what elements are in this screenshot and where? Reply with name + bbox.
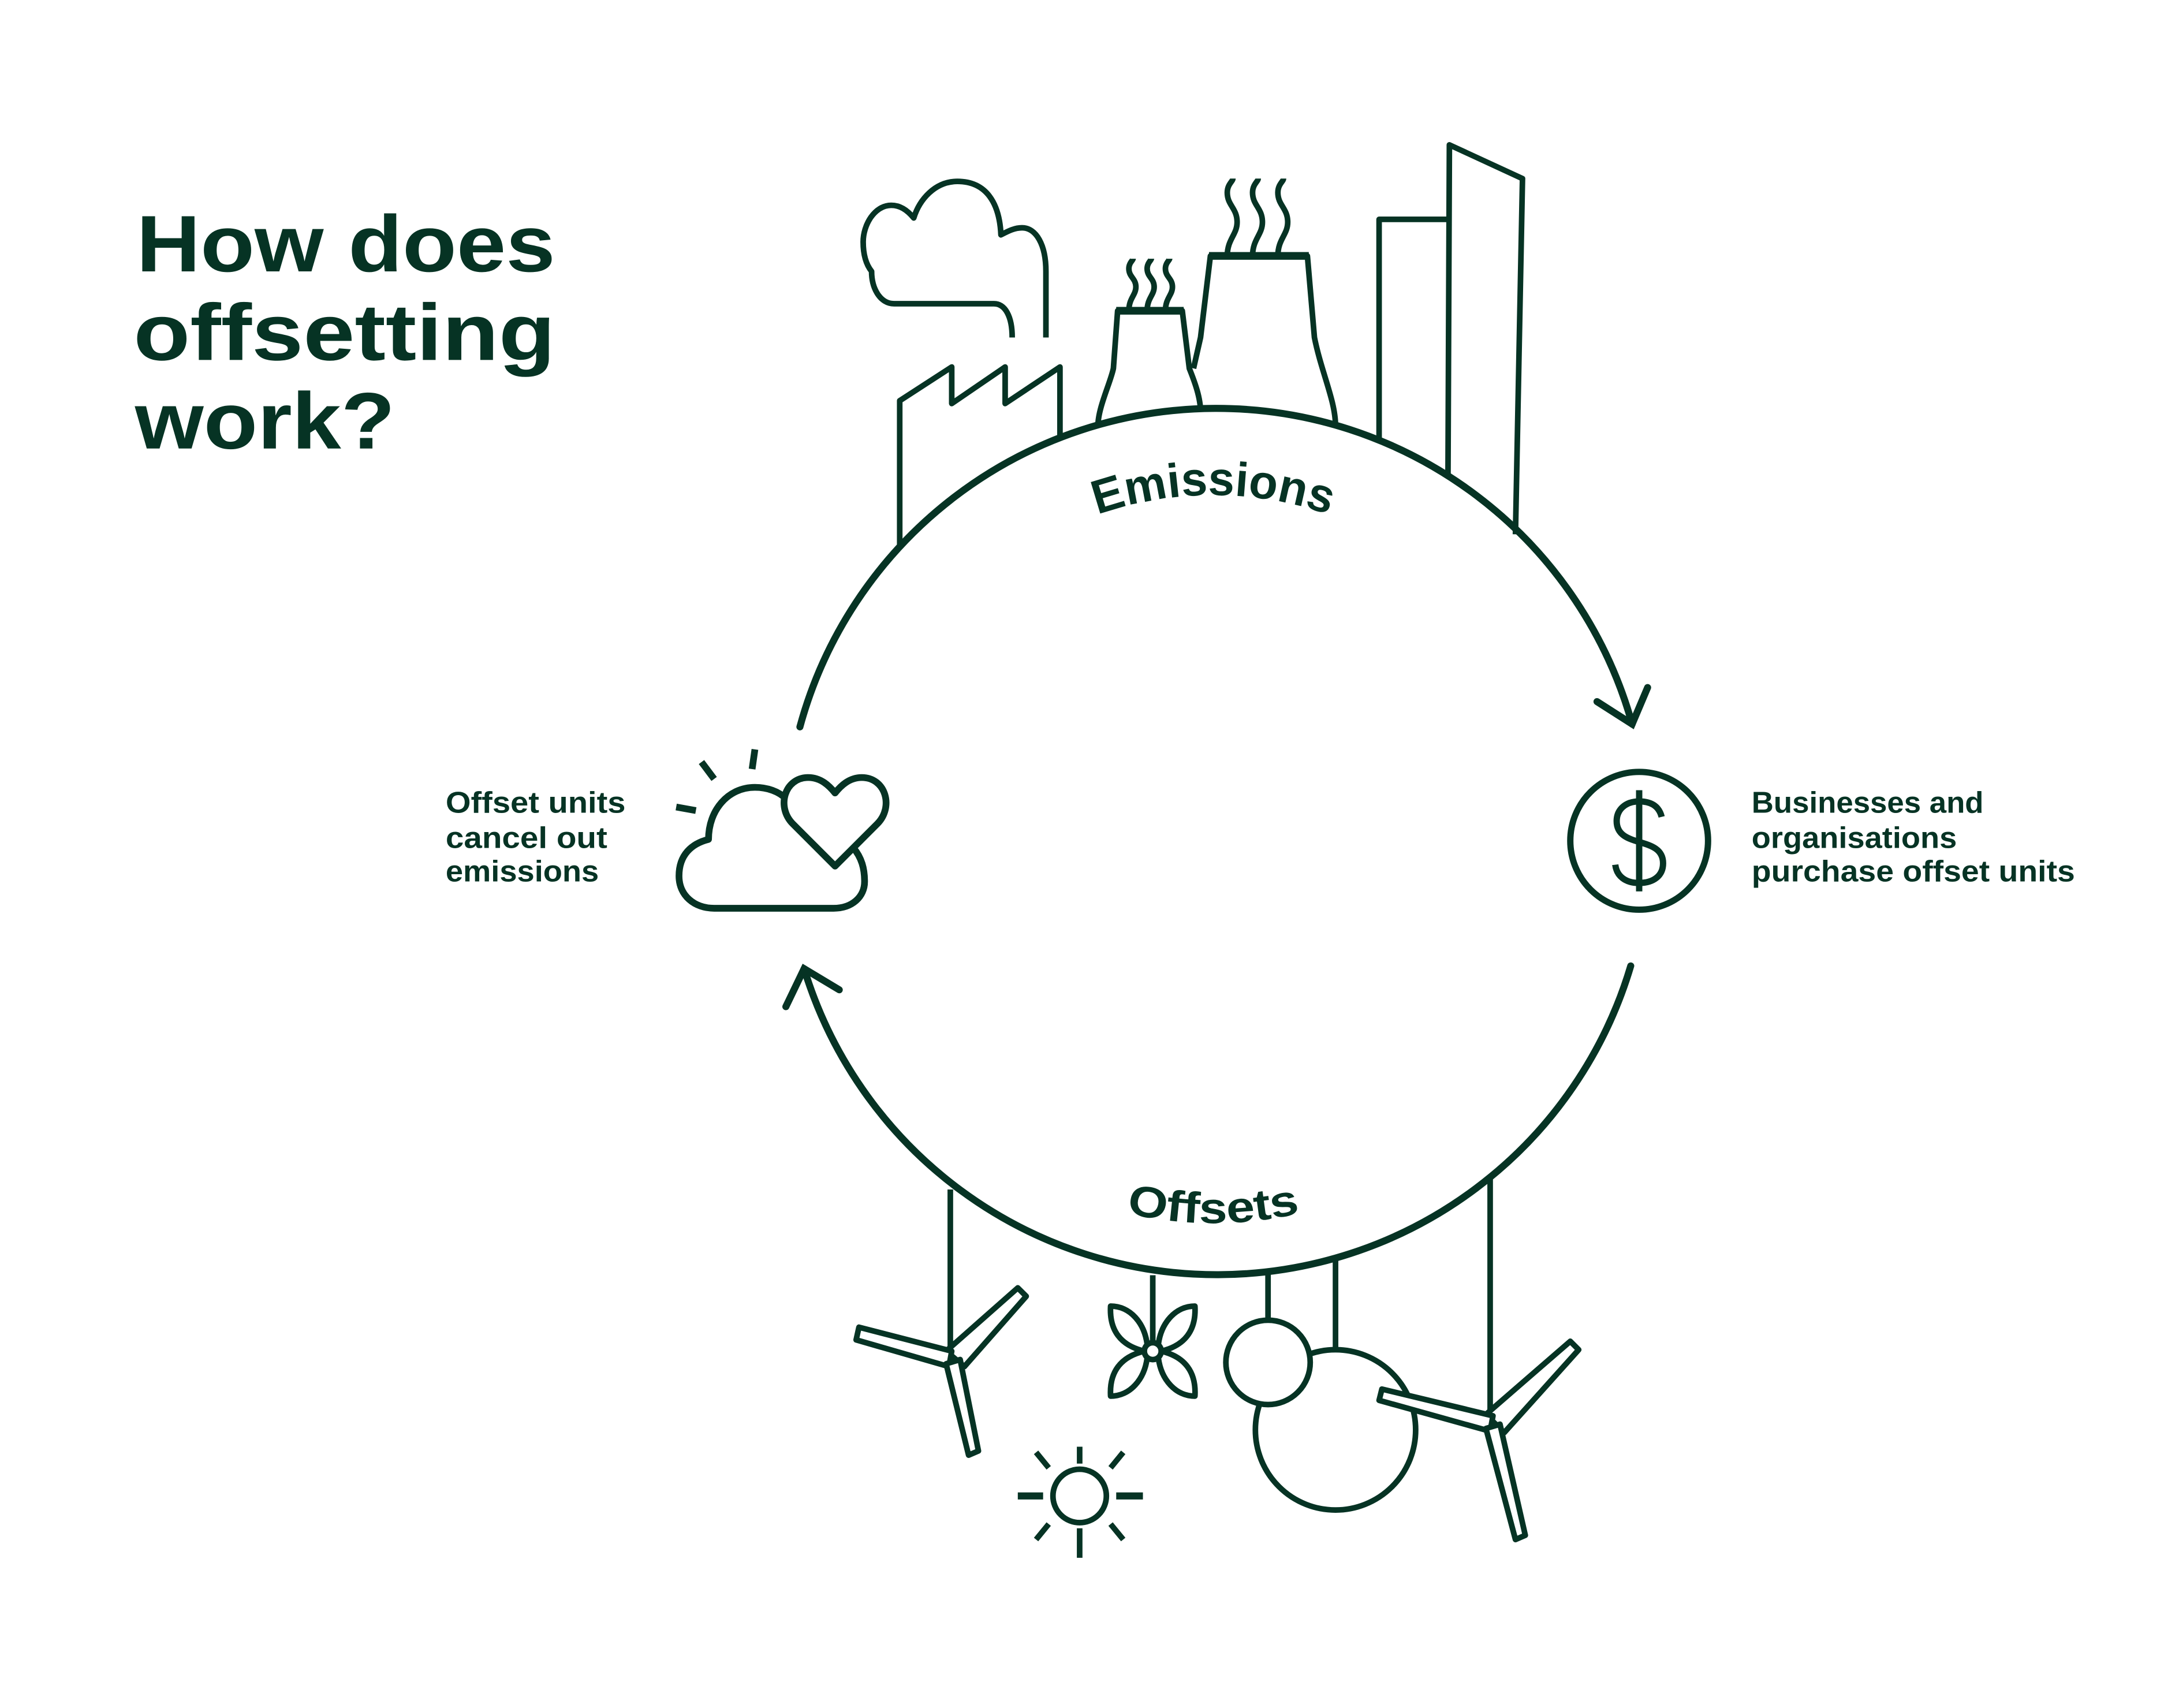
icon: big cooling tower	[1193, 178, 1335, 426]
cycle circle arcs	[786, 408, 1648, 1275]
icon: flower	[1110, 1275, 1195, 1396]
icon: cloud with heart	[676, 749, 886, 908]
offsets illustration	[856, 1178, 1579, 1558]
title	[133, 199, 555, 466]
icon: right wind turbine	[1379, 1178, 1579, 1539]
title: How does	[136, 199, 555, 289]
icon: left wind turbine	[856, 1189, 1026, 1455]
label: Emissions: Emissions	[1091, 461, 1333, 514]
icon: big circle	[1255, 1260, 1416, 1510]
text: offset units cancel out emissions: cancel out	[446, 821, 607, 855]
text: businesses purchase: organisations	[1752, 821, 1957, 855]
icon: dollar	[1570, 772, 1708, 909]
label: Offsets: Offsets	[1130, 1187, 1297, 1224]
title: offsetting	[133, 288, 555, 377]
icon: small circle	[1226, 1274, 1310, 1404]
text: offset units cancel out emissions	[446, 786, 626, 889]
emissions illustration	[863, 145, 1523, 549]
icon: sun	[1018, 1447, 1143, 1558]
icon: factory	[900, 367, 1060, 549]
text: businesses purchase	[1752, 786, 2075, 889]
text: offset units cancel out emissions: emissions	[446, 855, 599, 889]
icon: smoke cloud	[863, 181, 1046, 337]
title: work?	[135, 376, 395, 466]
text: businesses purchase: Businesses and	[1752, 786, 1984, 819]
icon: buildings	[1379, 145, 1523, 534]
icon: small cooling tower	[1098, 259, 1200, 426]
text: offset units cancel out emissions: Offset units	[446, 786, 626, 819]
text: businesses purchase: purchase offset units	[1752, 855, 2075, 889]
